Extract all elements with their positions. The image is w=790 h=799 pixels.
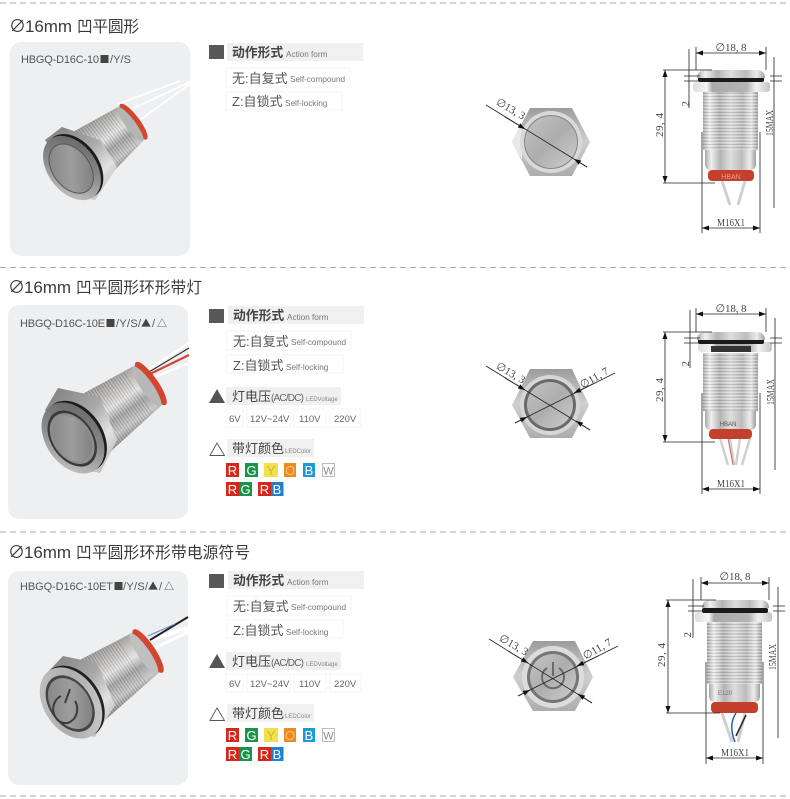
heading: power symbol: 凹平圆形环形带电源符号 [76,540,250,563]
voltage options: 12V~24V [250,414,290,425]
icon: outline triangle [210,443,224,456]
icon: filled triangle [209,654,225,668]
colour chips: W [323,466,334,478]
colour chips: O [285,463,295,478]
option: self-compound: 无:自复式 [233,334,289,349]
voltage options [226,409,361,427]
icon: filled triangle [209,389,225,403]
action form header: 动作形式 [233,308,284,323]
action form header: Action form [287,578,329,587]
front view with dimensions: ∅11, 7 [581,636,614,662]
side view with dimensions: M16X1 [717,478,745,490]
side view with dimensions: 29, 4 [656,642,668,667]
action form header: 动作形式 [232,45,283,60]
LED voltage header: 灯电压 [232,389,271,404]
model number: / [152,318,156,330]
side view with dimensions: 2 [680,361,692,366]
voltage options: 110V [299,679,321,690]
front view with dimensions: ∅13, 3 [497,632,531,659]
option: self-compound: Self-compound [290,75,346,84]
model number: / [159,581,163,593]
voltage options: 6V [229,414,241,425]
colour chips: R [260,747,269,762]
model number: ■ [100,51,110,66]
heading: flat round: ∅ [9,17,26,36]
action form header: 动作形式 [233,573,284,588]
colour chips: B [273,482,281,497]
action form header: Action form [286,50,328,59]
panel: flat round button with ring and power symbol [8,540,785,785]
side view with dimensions [654,303,782,494]
model number: ■ [106,315,116,330]
voltage options: 220V [334,414,357,425]
side view with dimensions: M16X1 [721,747,749,759]
LED voltage header [226,652,341,670]
LED colour header: 带灯颜色 [232,441,284,456]
colour chips: R [228,747,237,762]
side view with dimensions: 15MAX [764,110,776,136]
option: self-locking [227,355,343,373]
side view with dimensions: M16X1 [717,217,745,229]
side view with dimensions: 2 [680,101,692,106]
option: self-compound: 无:自复式 [232,71,288,86]
model number: ▲ [141,315,151,330]
LED colour header [227,704,314,722]
heading: flat round: 凹平圆形 [77,14,139,37]
front view with dimensions: ∅11, 7 [578,365,611,391]
options legend [209,306,364,497]
LED colour header: 带灯颜色 [232,706,284,721]
action form legend [209,43,363,110]
heading: power symbol: ∅ [8,543,25,562]
option: self-compound: 无:自复式 [233,599,289,614]
colour chips: R [228,728,237,743]
model number: /Y/S/ [116,318,142,330]
model number [20,315,167,330]
photo: push button [27,620,173,750]
colour chips: Y [267,728,276,743]
front view with dimensions: ∅13, 3 [494,360,528,387]
heading: ring light [8,275,202,298]
icon: square [209,309,224,323]
model number [21,51,131,66]
colour chips: R [228,482,237,497]
LED voltage header: (AC/DC) [271,658,304,669]
side view with dimensions [656,571,785,764]
front view with dimension: ∅13, 3 [494,96,528,123]
LED colour header: LEDColor [285,449,311,455]
heading: flat round [9,14,139,37]
model number: HBGQ-D16C-10ET [20,581,113,593]
side view with dimensions: 2 [682,632,694,638]
icon: square [209,45,224,59]
wires [118,81,190,120]
LED voltage header [226,387,341,405]
option: self-compound [226,68,350,87]
model number [20,578,174,593]
model number: /Y/S [110,54,131,66]
option: self-locking: Self-locking [285,99,328,108]
option: self-locking: Self-locking [286,363,329,372]
front view with dimensions [486,360,615,438]
model number: HBGQ-D16C-10E [20,318,105,330]
option: self-locking: Z:自锁式 [232,94,283,109]
action form header: Action form [287,313,329,322]
colour chips: G [240,482,251,497]
side view with dimensions: HBAN [721,174,741,181]
LED colour header: LEDColor [285,714,311,720]
option: self-locking [226,92,342,110]
model number: HBGQ-D16C-10 [21,54,99,66]
model number: /Y/S/ [123,581,149,593]
voltage options: 6V [229,679,241,690]
LED voltage header: LEDVoltage [306,397,338,403]
colour chips: G [246,463,257,478]
LED colour header [227,439,314,457]
model number: △ [164,578,174,593]
side view with dimensions: HBAN [720,422,736,428]
side view with dimensions: E120 [718,691,733,697]
side view with dimensions: ∅18, 8 [720,571,751,583]
model number: ▲ [148,578,158,593]
colour chips: O [285,728,295,743]
photo: push button [29,352,176,485]
option: self-compound [227,331,351,350]
options legend [209,571,364,762]
option: self-compound: Self-compound [291,338,347,347]
model number: △ [157,315,167,330]
side view with dimensions: 15MAX [765,379,777,405]
front view with dimension [486,96,590,176]
side view with dimensions [654,42,782,233]
action form header [228,306,364,324]
icon: power symbol on button [53,689,77,723]
colour chips: R [228,463,237,478]
colour chips [226,728,334,762]
action form header [227,43,363,61]
heading: ring light: ∅ [8,278,25,297]
wires [148,617,188,648]
voltage options: 110V [299,414,321,425]
heading: power symbol: 16mm [24,543,71,562]
photo: push button [31,94,157,211]
side view with dimensions: ∅18, 8 [716,303,747,315]
colour chips [226,463,334,497]
colour chips: R [260,482,269,497]
heading: ring light: 凹平圆形环形带灯 [76,275,202,298]
card: product photo [10,42,190,256]
panel: flat round button with ring light [8,275,782,519]
colour chips: W [323,730,334,742]
side view with dimensions: ∅18, 8 [716,42,747,54]
LED voltage header: (AC/DC) [271,393,304,404]
colour chips: G [240,747,251,762]
card: product photo [8,305,189,519]
card: product photo [8,571,188,785]
colour chips: B [305,463,313,478]
heading: flat round: 16mm [25,17,72,36]
LED voltage header: 灯电压 [232,654,271,669]
option: self-locking: Z:自锁式 [233,623,284,638]
LED voltage header: LEDVoltage [306,662,338,668]
option: self-locking [227,620,343,638]
front view with dimensions [489,632,618,711]
option: self-compound: Self-compound [291,603,347,612]
icon: square [209,574,224,588]
option: self-locking: Z:自锁式 [233,358,284,373]
voltage options [226,674,361,692]
icon: outline triangle [210,708,224,720]
model number: ■ [114,578,124,593]
colour chips: Y [267,463,276,478]
voltage options: 220V [334,679,357,690]
colour chips: B [273,747,281,762]
option: self-compound [227,596,351,615]
option: self-locking: Self-locking [286,628,329,637]
colour chips: B [305,728,313,743]
heading: ring light: 16mm [24,278,71,297]
voltage options: 12V~24V [250,679,290,690]
colour chips: G [246,728,257,743]
action form header [228,571,364,589]
side view with dimensions: 15MAX [767,644,779,670]
panel: flat round button [9,14,782,256]
side view with dimensions: 29, 4 [654,378,666,402]
side view with dimensions: 29, 4 [654,112,666,137]
wires [147,343,189,378]
